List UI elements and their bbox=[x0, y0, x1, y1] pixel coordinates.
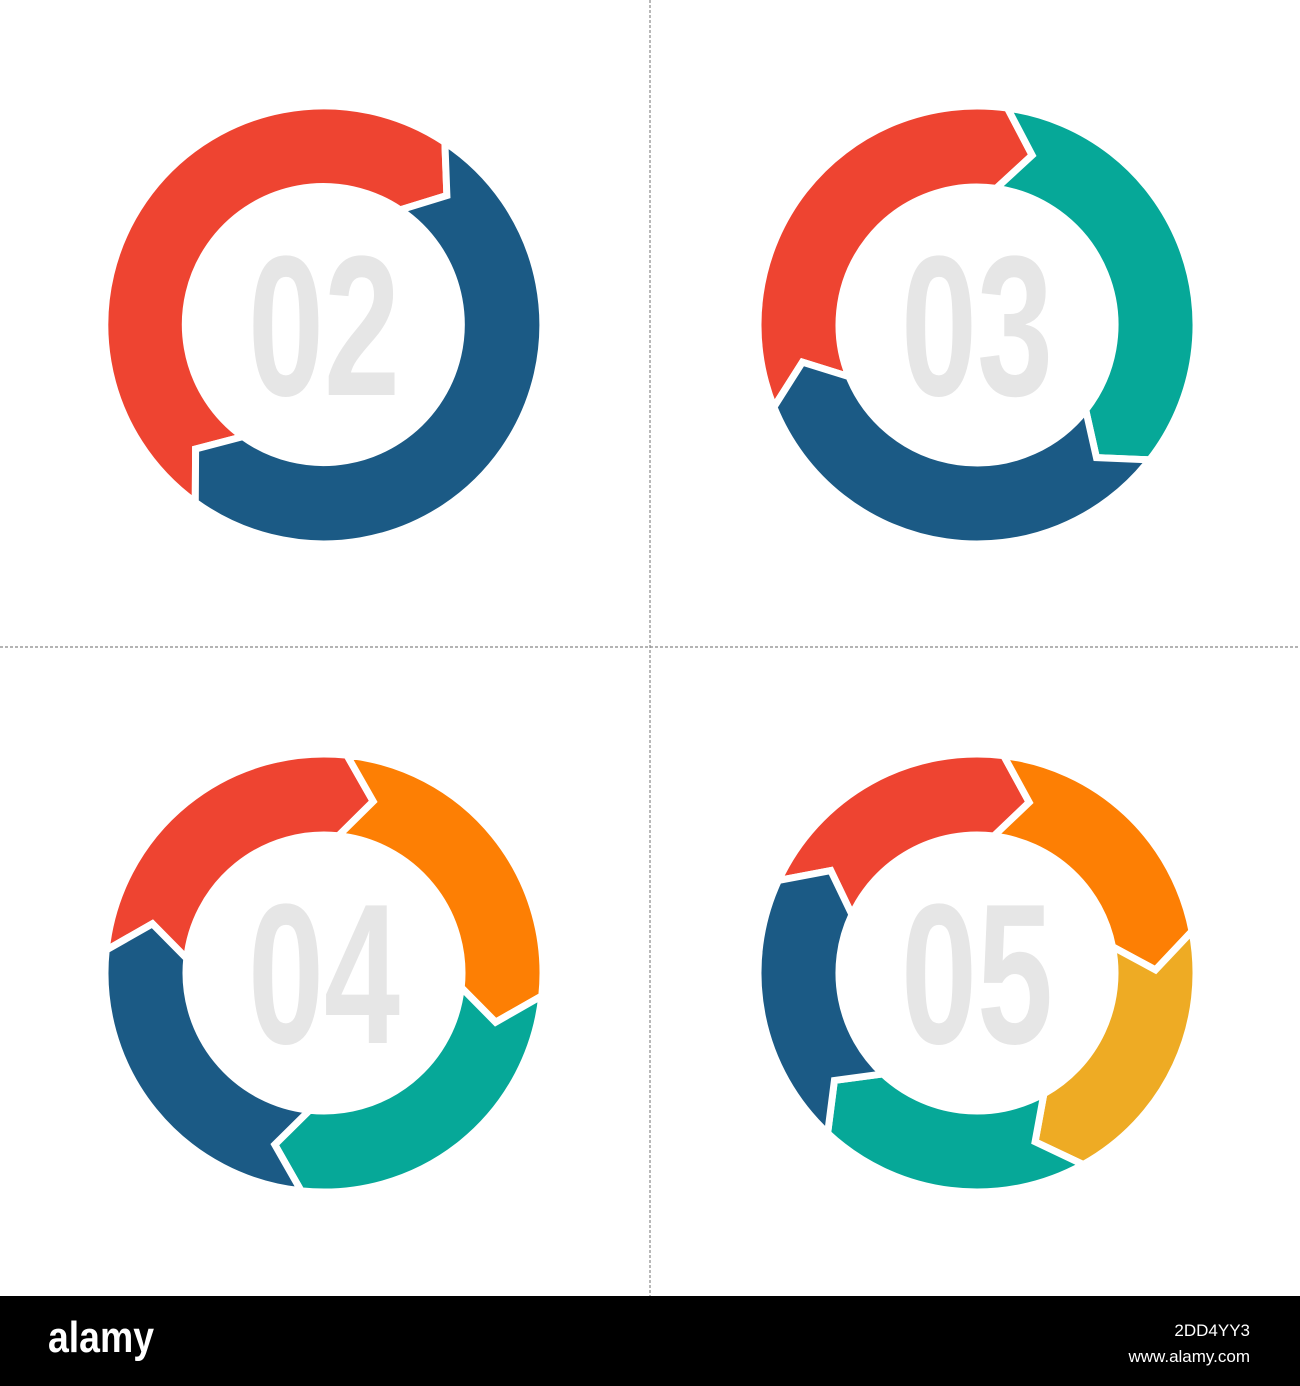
number 02: 02 bbox=[248, 215, 400, 438]
number 04: 04 bbox=[248, 863, 400, 1086]
panel: cycle 04 bbox=[83, 732, 565, 1214]
arrow: red 04 bbox=[106, 732, 378, 976]
panel: cycle 05 bbox=[675, 692, 1232, 1266]
arrow: red 03 bbox=[692, 79, 1083, 407]
arrow: red 05 bbox=[779, 692, 1043, 963]
arrow: blue 04 bbox=[83, 919, 327, 1191]
arrow: teal 05 bbox=[807, 995, 1083, 1266]
arrow: teal 04 bbox=[270, 970, 542, 1214]
arrow: blue 03 bbox=[752, 254, 1150, 632]
arrow: blue 05 bbox=[675, 849, 960, 1133]
arrow: orange 05 bbox=[980, 756, 1210, 974]
logo: alamy: alamy bbox=[48, 1313, 154, 1362]
website: www.alamy.com bbox=[1127, 1347, 1250, 1366]
panel: cycle 03 bbox=[692, 79, 1224, 632]
number 05: 05 bbox=[901, 863, 1053, 1086]
panel: cycle 02 bbox=[18, 19, 627, 628]
arrow: orange 04 bbox=[321, 755, 565, 1027]
arrow: blue 02 bbox=[171, 121, 627, 628]
arrow: teal 03 bbox=[961, 108, 1224, 469]
image id: 2DD4YY3 bbox=[1174, 1321, 1250, 1340]
footer banner bbox=[0, 1296, 1300, 1386]
arrow: yellow 05 bbox=[1001, 931, 1232, 1173]
number 03: 03 bbox=[901, 215, 1053, 438]
arrow: red 02 bbox=[18, 19, 471, 516]
